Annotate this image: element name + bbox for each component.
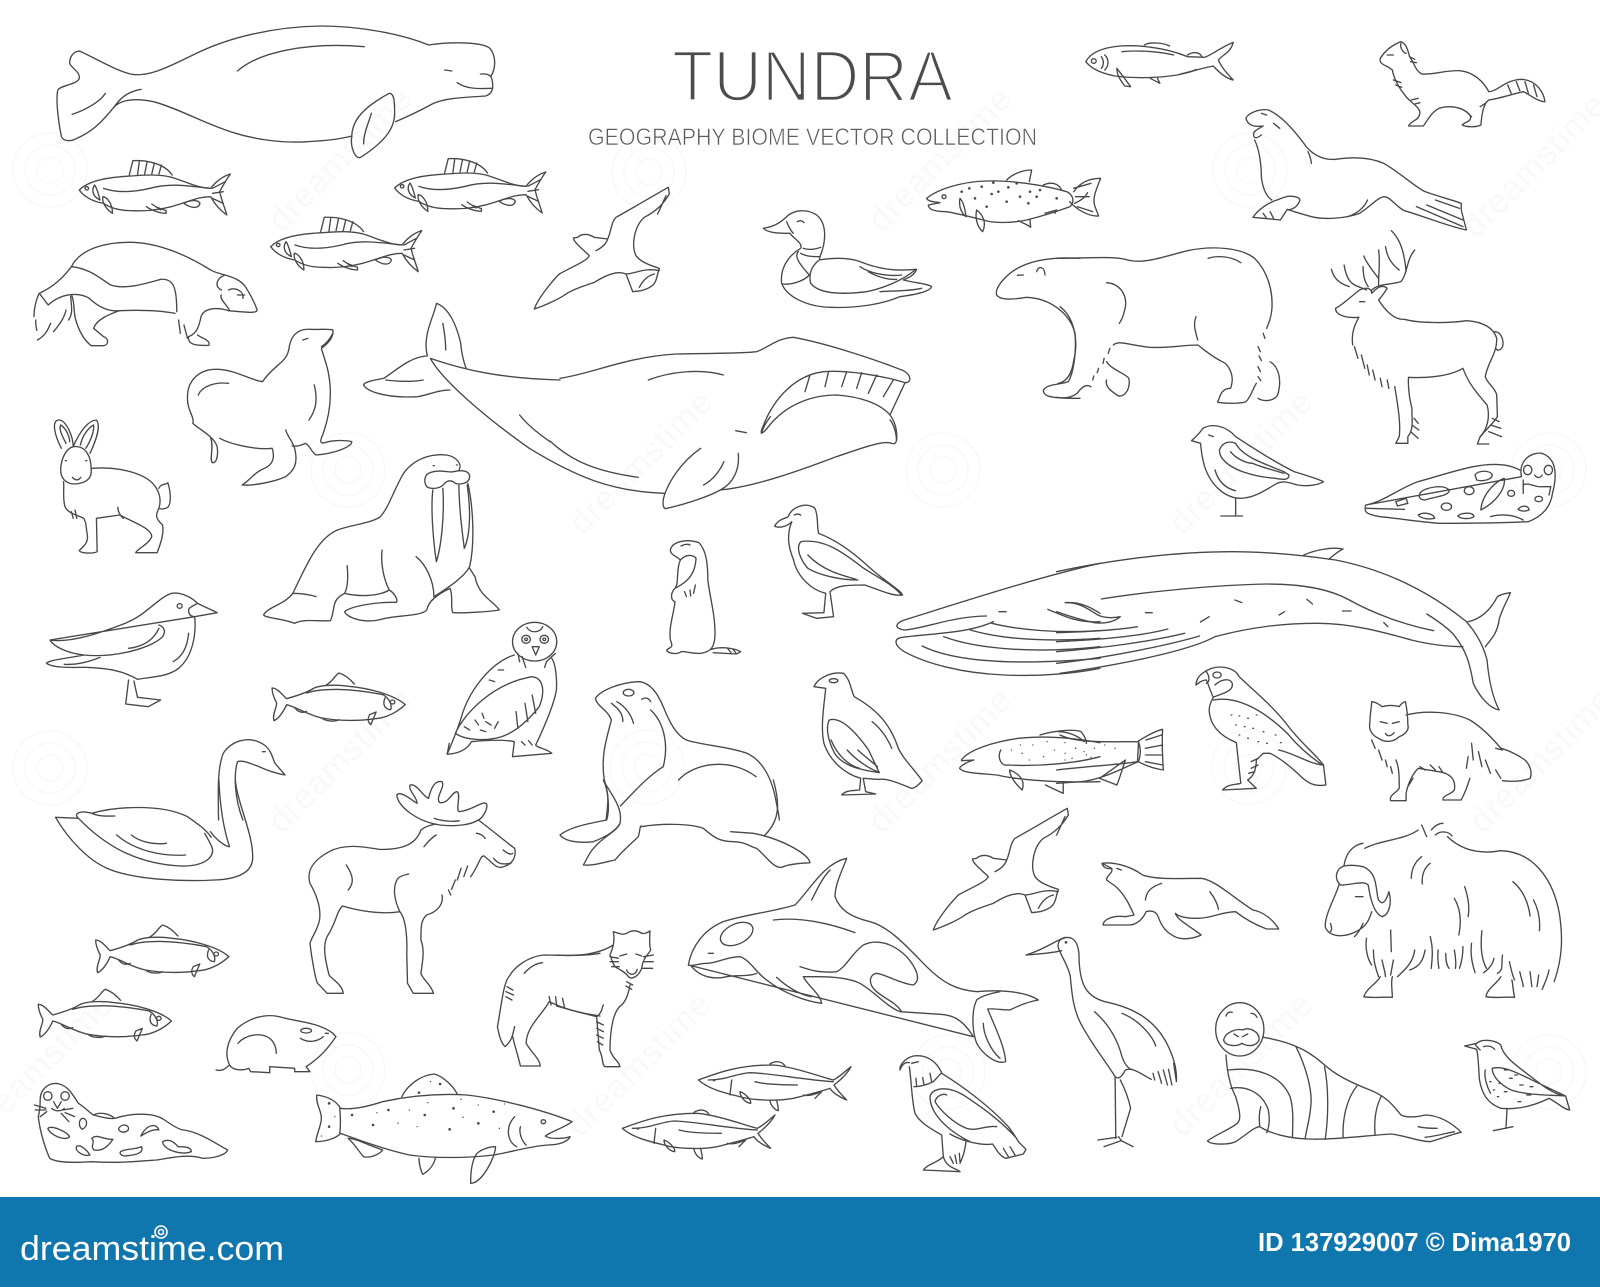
caribou: [1331, 231, 1503, 444]
standing gull: [775, 505, 902, 618]
spotted trout top: [927, 170, 1101, 232]
crane: [1026, 937, 1176, 1147]
beluga whale: [57, 26, 495, 158]
snowy owl: [447, 622, 557, 757]
killer whale: [688, 858, 1038, 1062]
swan: [55, 740, 285, 881]
spotted seal bottom left: [34, 1084, 228, 1162]
grayling fish 3: [271, 217, 422, 272]
ground squirrel: [667, 541, 741, 654]
text: dreamstime: [860, 79, 1020, 239]
image id and credit: ID 137929007 © Dima1970: [1258, 1227, 1571, 1257]
footer banner: [0, 1197, 1600, 1287]
text: dreamstime: [1161, 382, 1321, 542]
bearded seal pup: [1207, 1003, 1461, 1144]
mallard duck: [763, 211, 932, 308]
elephant seal: [1246, 110, 1466, 230]
meadowlark: [1465, 1040, 1570, 1131]
big trout: [316, 1074, 572, 1183]
partridge: [814, 673, 922, 795]
flying gull left: [534, 187, 669, 309]
salmon top: [1086, 42, 1233, 87]
muskox: [1325, 823, 1562, 997]
text: dreamstime: [260, 79, 420, 239]
herring 1: [96, 925, 229, 977]
herring 2: [38, 989, 171, 1041]
salmon lower 1: [698, 1062, 851, 1111]
arctic fox: [1370, 702, 1531, 801]
sea eagle: [900, 1056, 1026, 1172]
text: dreamstime: [559, 984, 719, 1144]
bowhead whale: [364, 303, 910, 509]
flying gull right: [933, 808, 1068, 930]
text: dreamstime: [260, 680, 420, 840]
dreamstime logo: dreamstime.com: [20, 1230, 284, 1268]
arctic hare: [54, 420, 170, 553]
polar bear: [996, 248, 1280, 403]
moose: [309, 781, 515, 993]
gyrfalcon: [1196, 667, 1326, 790]
walrus: [264, 455, 499, 623]
small seal right: [1102, 863, 1279, 939]
fur seal: [560, 682, 810, 867]
grayling fish 1: [79, 161, 230, 215]
sea lion: [187, 329, 352, 485]
brown trout middle: [960, 729, 1163, 793]
text: dreamstime: [860, 680, 1020, 840]
finch: [1192, 426, 1323, 516]
salmon lower 2: [622, 1110, 775, 1159]
title: TUNDRA: [672, 37, 953, 117]
text: dreamstime: [1161, 984, 1321, 1144]
raven: [46, 593, 217, 707]
stoat: [1380, 42, 1545, 127]
arctic wolf: [497, 931, 653, 1067]
lemming: [216, 1016, 336, 1073]
grayling fish 2: [395, 159, 546, 213]
subtitle: GEOGRAPHY BIOME VECTOR COLLECTION: [588, 124, 1037, 151]
wolverine: [34, 242, 257, 346]
text: dreamstime: [561, 382, 721, 542]
herring left middle: [272, 673, 405, 725]
blue whale: [896, 548, 1510, 710]
ringed seal right: [1365, 453, 1555, 523]
